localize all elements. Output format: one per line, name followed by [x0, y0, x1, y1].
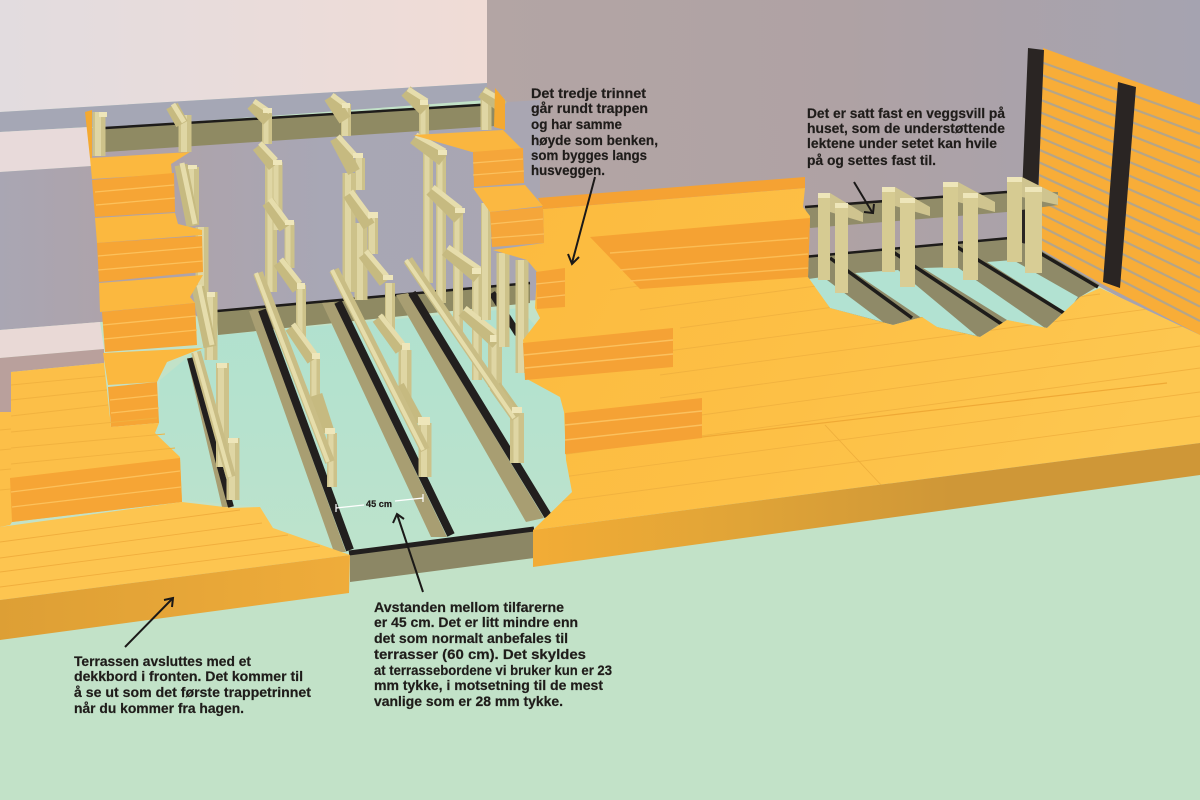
text: joist spacing note: er 45 cm. Det er litt mindre enn: [374, 614, 578, 630]
slatted wall: right: [1020, 48, 1200, 335]
arrow: to 45 cm: [393, 514, 423, 592]
step: third middle: [473, 185, 544, 247]
stairs: left flight: [90, 152, 203, 427]
text: third step note: går rundt trappen: [531, 100, 648, 116]
stair frame: fifth: [482, 88, 522, 373]
text: wall sill note: huset, som de understøttende: [807, 120, 1005, 136]
stair frame: second: [252, 101, 335, 487]
text: joist spacing note: at terrassebordene vi bruker kun er 23: [374, 662, 612, 678]
deck: left landing: [0, 363, 182, 527]
text: joist spacing note: [374, 599, 612, 709]
fascia: right terrace front: [533, 443, 1200, 567]
deck: lowest left step: [0, 502, 350, 640]
text: third step note: [531, 85, 658, 178]
floor: green ground between joists: [155, 308, 600, 555]
text: fascia note: dekkbord i fronten. Det kommer til: [74, 668, 303, 684]
house wall: left upper band: [0, 0, 487, 172]
arrow: to third step: [568, 177, 595, 264]
text: joist spacing note: det som normalt anbefales til: [374, 630, 568, 646]
text: wall sill note: Det er satt fast en veggsvill på: [807, 105, 1005, 121]
text: joist spacing note: Avstanden mellom tilfarerne: [374, 599, 564, 615]
text: fascia note: når du kommer fra hagen.: [74, 700, 244, 716]
text: third step note: husveggen.: [531, 162, 605, 178]
riser: second step right: [523, 328, 673, 380]
house wall: right: [487, 0, 1200, 340]
deck: big right terrace with steps and bench: [413, 130, 1200, 530]
step: third upper: [413, 130, 524, 187]
wall sill: right upper beam: [805, 192, 1058, 228]
text: wall sill note: lektene under setet kan hvile: [807, 135, 997, 151]
text: third step note: og har samme: [531, 116, 622, 132]
text: fascia note: å se ut som det første trappetrinnet: [74, 684, 311, 700]
dimension: 45 cm: 45 cm: [366, 499, 392, 510]
arrow: to dekkbord: [125, 598, 173, 647]
dimension: 45 cm: [336, 494, 423, 512]
text: joist spacing note: terrasser (60 cm). Det skyldes: [374, 646, 586, 662]
stair frame: third: [330, 95, 430, 477]
stair frame: left: [85, 104, 238, 500]
text: joist spacing note: mm tykke, i motsetning til de mest: [374, 677, 603, 693]
riser: third lower: [536, 268, 565, 309]
floor: right bench opening: [803, 238, 1100, 337]
text: joist spacing note: vanlige som er 28 mm tykke.: [374, 693, 563, 709]
riser: first step right: [565, 398, 702, 454]
riser: top strip behind bench: [538, 177, 805, 209]
stair frame: fourth: [406, 89, 522, 463]
text: third step note: høyde som benken,: [531, 132, 658, 148]
front beam: [349, 528, 534, 582]
riser: bench front: [590, 218, 810, 289]
text: fascia note: [74, 653, 311, 716]
house wall: left lower: [0, 100, 540, 412]
text: third step note: Det tredje trinnet: [531, 85, 646, 101]
wall sill: lower left beam: [217, 283, 530, 335]
text: wall sill note: på og settes fast til.: [807, 152, 936, 168]
text: wall sill note: [807, 105, 1005, 168]
joists: left deck: [187, 293, 548, 552]
wall sill: upper left beam: [105, 104, 495, 152]
arrow: to wall sill: [854, 182, 874, 213]
bench frames: four pairs of posts: [818, 177, 1058, 293]
text: third step note: som bygges langs: [531, 147, 647, 163]
text: fascia note: Terrassen avsluttes med et: [74, 653, 251, 669]
